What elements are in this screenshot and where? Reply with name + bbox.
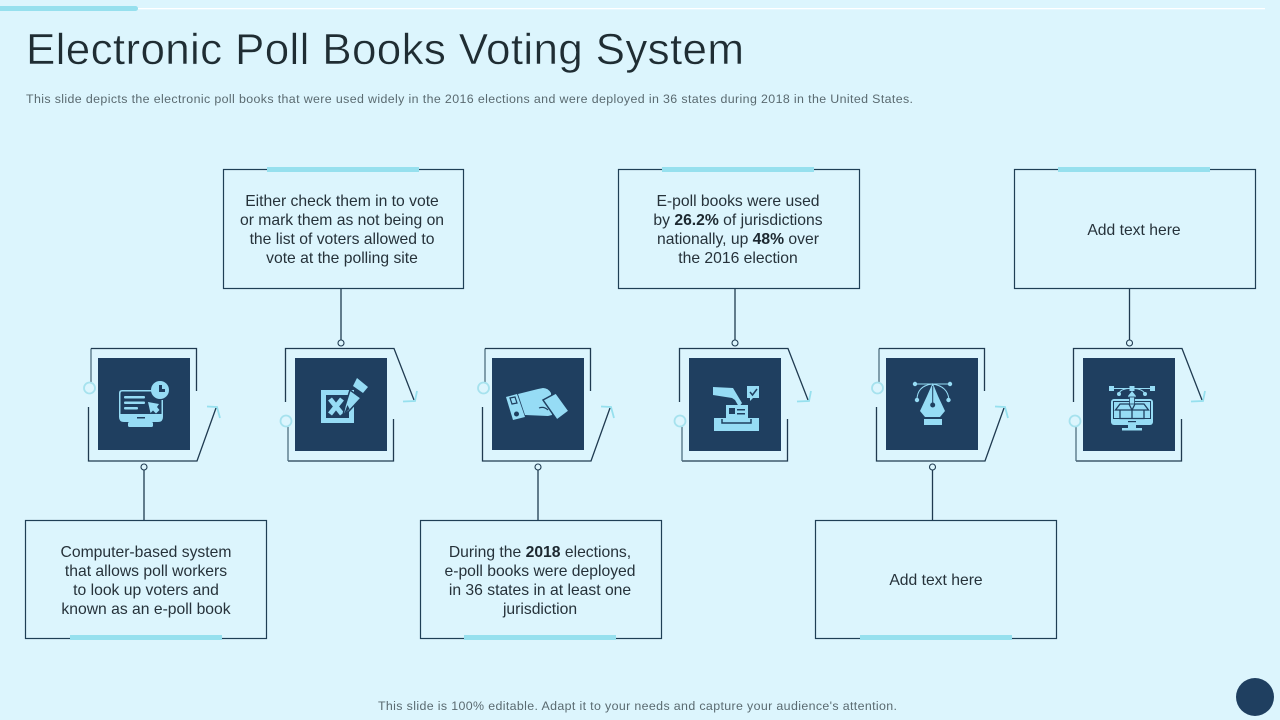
text box: computer-based system: that allows poll workers — [65, 563, 227, 580]
text box: jurisdictions statistics — [618, 167, 860, 288]
text box: 2018 elections — [420, 520, 662, 640]
text box: jurisdictions statistics: nationally, up 48% over — [657, 231, 819, 248]
text box: 2018 elections: in 36 states in at least one — [449, 582, 631, 599]
icon: computer with clock and cursor — [119, 381, 169, 427]
text box: check in voters — [224, 167, 464, 288]
text box: check in voters: Either check them in to vote — [245, 193, 439, 210]
icon: hand holding card — [506, 388, 569, 420]
text box: computer-based system: to look up voters and — [73, 582, 219, 599]
text box: 2018 elections: jurisdiction — [502, 601, 577, 618]
icon: monitor with open box — [1109, 386, 1155, 430]
text box: placeholder top — [1014, 167, 1256, 288]
footer note: This slide is 100% editable. Adapt it to your needs and capture your audience's attention. — [378, 699, 897, 713]
text box: placeholder top: Add text here — [1087, 222, 1181, 239]
text box: check in voters: or mark them as not being on — [240, 212, 444, 229]
step 6: monitor with package — [1070, 289, 1205, 461]
text box: computer-based system: known as an e-poll book — [61, 601, 231, 618]
icon: vector pen nib — [913, 382, 952, 425]
top accent bar — [0, 6, 1265, 11]
text box: check in voters: the list of voters allowed to — [250, 231, 435, 248]
text box: computer-based system — [26, 520, 266, 640]
step 1: computer system — [84, 348, 220, 520]
step 2: check mark vote — [280, 289, 417, 461]
subtitle: This slide depicts the electronic poll books that were used widely in the 2016 elections and were deployed in 36 states during 2018 in the United States. — [26, 92, 913, 106]
text box: jurisdictions statistics: E-poll books were used — [656, 193, 820, 210]
text box: check in voters: vote at the polling site — [266, 250, 418, 267]
text box: computer-based system: Computer-based system — [61, 544, 231, 561]
page number circle — [1236, 678, 1274, 716]
step 5: pen tool — [872, 348, 1008, 520]
title: Electronic Poll Books Voting System — [26, 25, 744, 74]
step 3: handing ballot — [478, 348, 614, 520]
step 4: ballot box — [674, 289, 811, 461]
icon: checkbox with pencil — [321, 378, 368, 423]
text box: 2018 elections: e-poll books were deployed — [444, 563, 636, 580]
text box: placeholder bottom — [816, 520, 1056, 640]
text box: placeholder bottom: Add text here — [889, 572, 983, 589]
text box: 2018 elections: During the 2018 elections, — [449, 544, 631, 561]
text box: jurisdictions statistics: by 26.2% of jurisdictions — [653, 212, 823, 229]
icon: hand casting vote into box — [713, 386, 759, 431]
text box: jurisdictions statistics: the 2016 election — [678, 250, 798, 267]
